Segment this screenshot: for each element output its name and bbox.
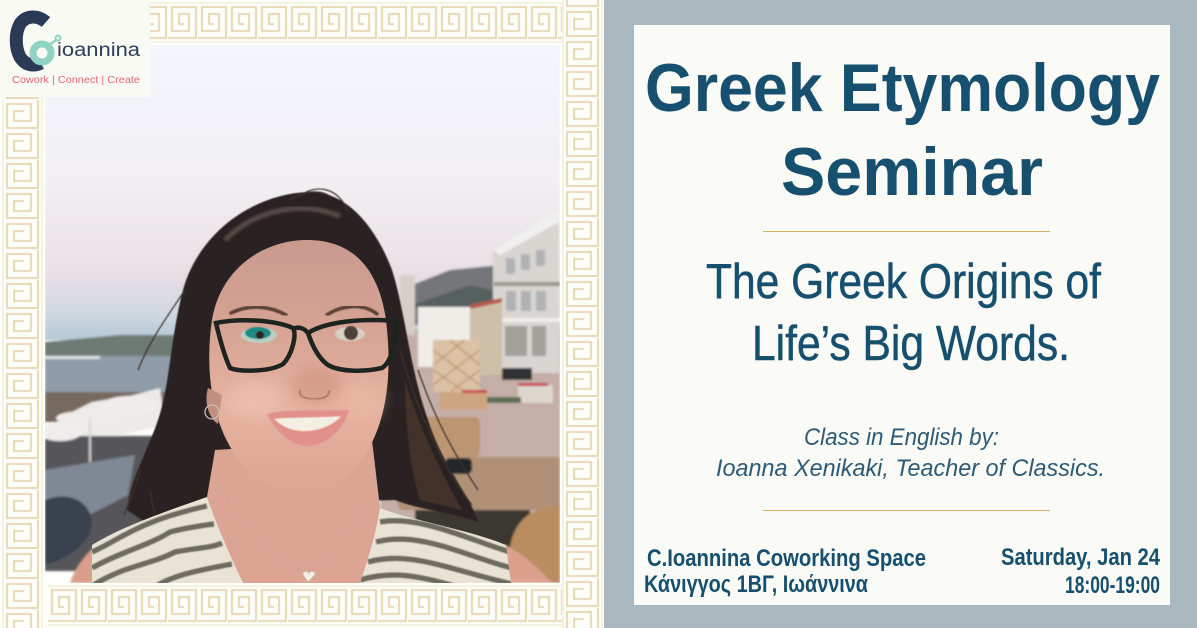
subtitle: The Greek Origins of (706, 255, 1101, 309)
logo: letter C (16, 17, 46, 65)
person: eyes (241, 326, 365, 343)
venue: C.Ioannina Coworking Space (647, 545, 926, 572)
photo: portrait by the sea (38, 45, 560, 590)
person: nose (300, 390, 329, 399)
person: smile (267, 410, 349, 446)
instructor (716, 424, 1105, 482)
person: shirt with stripes (92, 497, 511, 583)
person: earring (205, 405, 219, 419)
subtitle (706, 255, 1101, 371)
logo: tagline: Cowork | Connect | Create (12, 74, 140, 86)
logo (0, 0, 150, 97)
venue (644, 545, 926, 598)
logo: teal ring (33, 36, 60, 62)
divider (763, 231, 1050, 232)
panel: seminar details (634, 25, 1170, 605)
person: hair (124, 189, 478, 555)
divider (763, 510, 1050, 511)
person: neck and chest (207, 440, 380, 583)
border: Greek key frame (0, 0, 604, 628)
title: Seminar (781, 134, 1043, 210)
title (645, 50, 1160, 210)
person: eyebrows (231, 307, 377, 315)
instructor: Ioanna Xenikaki, Teacher of Classics. (716, 455, 1105, 482)
date and time: Saturday, Jan 24 (1001, 544, 1161, 571)
date and time: 18:00-19:00 (1065, 572, 1160, 599)
person: face (206, 240, 390, 449)
date and time (1001, 544, 1161, 599)
person: glasses (216, 320, 397, 371)
panel: photo with Greek key border (0, 0, 604, 628)
subtitle: Life’s Big Words. (752, 317, 1070, 371)
venue: Κάνιγγος 1ΒΓ, Ιωάννινα (644, 571, 868, 598)
title: Greek Etymology (645, 50, 1160, 126)
photo background: sky, sea and waterfront (38, 45, 560, 583)
instructor: Class in English by: (804, 424, 999, 451)
person: necklace (225, 490, 368, 572)
logo: wordmark: ioannina (57, 40, 141, 61)
